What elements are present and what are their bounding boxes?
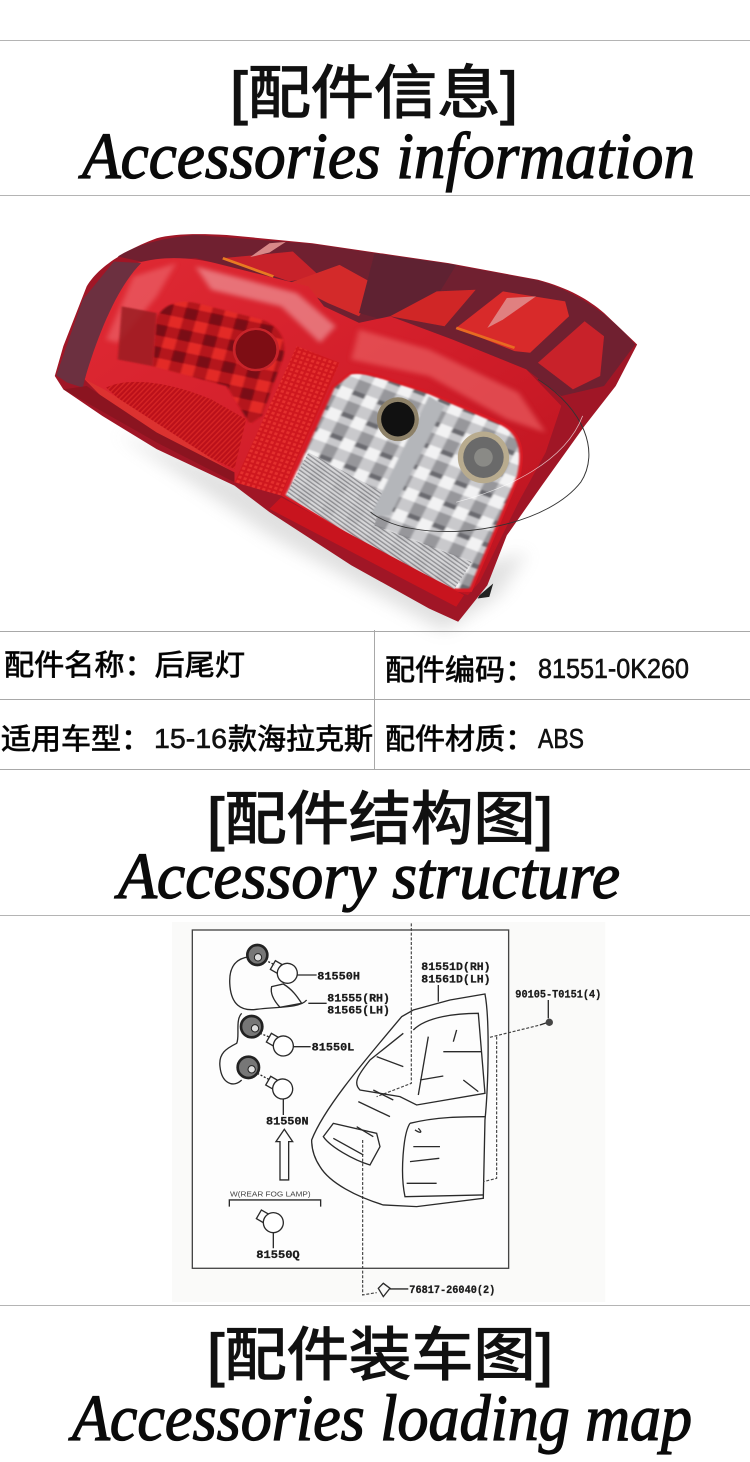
fog lamp arrow and bracket [229, 1129, 321, 1207]
part number labels: 76817-26040(2) [409, 1285, 495, 1297]
thin ellipse watermark [371, 379, 589, 532]
top red blocks [223, 242, 604, 389]
heading: accessories information: Accessories information [78, 120, 695, 193]
part number labels [230, 962, 601, 1297]
part number labels: 81550L [312, 1043, 355, 1055]
clear lens ribbed lower [286, 452, 472, 589]
cell: part code: 配件编码： [385, 654, 535, 687]
lamp line drawing [312, 994, 540, 1207]
part number labels: 81551D(RH) [421, 962, 491, 974]
cell: fitted model: 15-16 [154, 723, 227, 754]
lens highlights [106, 263, 546, 432]
cell: fitted model: 适用车型： [1, 723, 151, 756]
heading: accessory structure: Accessory structure [114, 840, 620, 913]
lamp outer housing [55, 234, 637, 622]
lower ribbed lens [106, 382, 246, 469]
heading: accessories information [78, 61, 695, 193]
cell: material: ABS [538, 723, 584, 754]
part number labels: 90105-T0151(4) [515, 989, 601, 1001]
cell: part code: 81551-0K260 [538, 653, 689, 684]
clear reverse lens [281, 371, 523, 592]
bottom edge stripes [270, 497, 464, 607]
part number labels: 81550H [317, 971, 360, 983]
heading: accessories information: [配件信息] [230, 61, 518, 126]
bulb sockets [377, 397, 509, 483]
heading: accessory structure: [配件结构图] [207, 787, 553, 852]
part number labels: 81550N [266, 1116, 309, 1128]
left dark panel [56, 262, 141, 388]
part number labels: 81561D(LH) [421, 975, 491, 987]
cell: material: 配件材质： [385, 723, 535, 756]
left bulb chamber [153, 302, 284, 424]
photo: red tail lamp [55, 234, 637, 632]
ribbed red strip [235, 346, 340, 496]
diagram: exploded parts drawing [172, 922, 605, 1302]
table: accessory details [1, 649, 689, 756]
top maroon band [118, 235, 635, 396]
wiring and sockets [220, 945, 307, 1084]
cell: part code [385, 653, 689, 687]
cell: fitted model [1, 723, 373, 756]
heading: accessories loading map: [配件装车图] [207, 1323, 553, 1388]
heading: accessories loading map [68, 1323, 692, 1455]
heading: accessories loading map: Accessories loading map [68, 1382, 692, 1455]
heading: accessory structure [114, 787, 620, 913]
part number labels: 81555(RH) [327, 993, 390, 1005]
bulbs [254, 956, 327, 1248]
cell: part name: 配件名称：后尾灯 [4, 649, 245, 682]
part number labels: 81565(LH) [327, 1005, 390, 1017]
main red lens [85, 258, 561, 595]
part number labels: W(REAR FOG LAMP) [230, 1190, 311, 1199]
cell: fitted model: 款海拉克斯 [228, 723, 373, 756]
screw and clip [378, 985, 553, 1297]
part number labels: 81550Q [256, 1250, 300, 1262]
